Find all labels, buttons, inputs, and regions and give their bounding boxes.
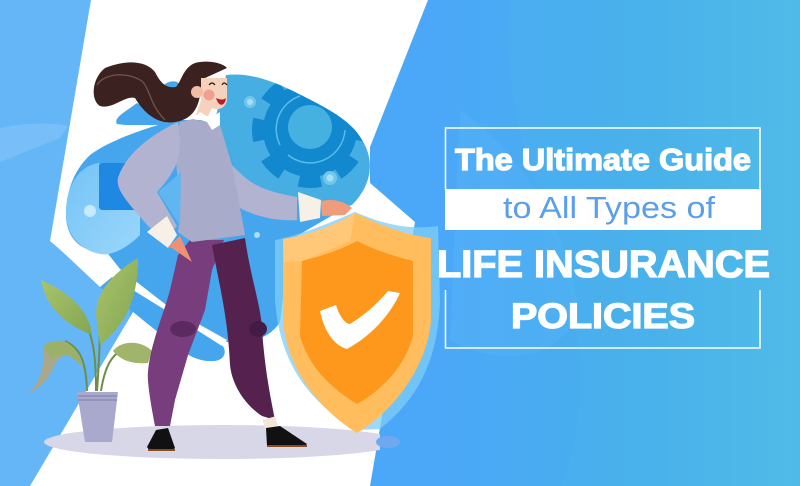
hand left (168, 236, 192, 262)
diagonal white strip (50, 236, 227, 346)
light blue circle blob (66, 163, 140, 254)
left shoe (147, 428, 175, 451)
shield inner (300, 241, 413, 404)
arm left (118, 122, 180, 240)
white angled panel (30, 0, 428, 486)
plant (27, 258, 152, 442)
neck and face (196, 78, 227, 116)
check mark (320, 291, 400, 349)
woman (94, 62, 352, 451)
hand right (321, 200, 352, 216)
title highlight band (445, 189, 761, 230)
gear icon (252, 83, 363, 188)
title: to All Types of: to All Types of (503, 190, 715, 225)
shield halo (275, 212, 440, 430)
right leg (212, 238, 275, 420)
cuff left (147, 216, 177, 248)
sparkles (84, 96, 337, 238)
shield facet (283, 213, 355, 262)
left leg (148, 240, 224, 426)
right shoe (263, 416, 278, 430)
blue background blob (66, 74, 370, 343)
hair (94, 62, 227, 123)
gap between arm and torso (158, 172, 181, 226)
collar (194, 112, 220, 130)
title frame (446, 128, 760, 348)
title: POLICIES: POLICIES (511, 297, 695, 336)
title: LIFE INSURANCE: LIFE INSURANCE (437, 244, 770, 286)
title: The Ultimate Guide: The Ultimate Guide (455, 142, 751, 177)
torso (176, 119, 245, 242)
ground shadow (44, 425, 400, 459)
shield outer (283, 213, 431, 433)
shield (275, 212, 440, 433)
lower blue lobe (98, 274, 225, 361)
blue square (99, 163, 139, 210)
cuff right (298, 192, 321, 222)
arm right (232, 165, 297, 220)
